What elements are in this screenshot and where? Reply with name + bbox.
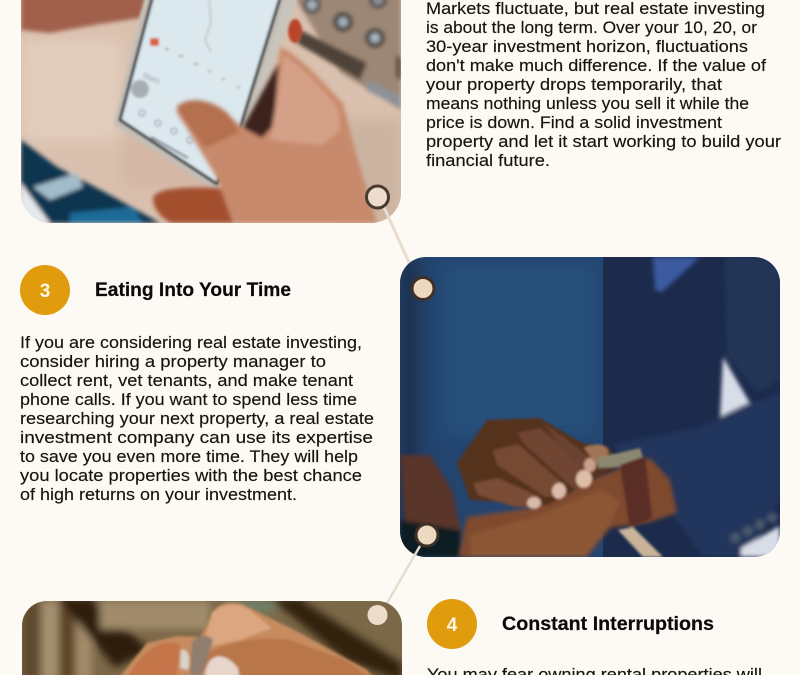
photo: hands holding coin [22,598,402,675]
number badge 3: 3 [40,281,50,302]
text block: markets fluctuate: price is down. Find a solid investment [426,113,722,132]
text block: eating into your time: consider hiring a property manager to [20,352,326,371]
heading: eating into your time: Eating Into Your Time [95,280,291,301]
text block: markets fluctuate: don't make much difference. If the value of [426,56,766,75]
fingers [457,418,620,505]
number badge 3 [20,265,70,315]
timeline node: photo 1 [366,186,388,208]
text block: eating into your time: you locate properties with the best chance [20,466,362,485]
text block: eating into your time: to save you even more time. They will help [20,447,358,466]
number badge 4 [427,599,477,649]
text block: eating into your time: phone calls. If you want to spend less time [20,390,357,409]
text block: eating into your time: of high returns on your investment. [20,485,297,504]
text block: markets fluctuate: 30-year investment horizon, fluctuations [426,37,748,56]
text block: eating into your time: If you are considering real estate investing, [20,333,362,352]
text block: markets fluctuate: is about the long term. Over your 10, 20, or [426,18,757,37]
text block: markets fluctuate: means nothing unless you sell it while the [426,94,749,113]
timeline node: photo 2 bottom [416,524,438,546]
number badge 4: 4 [447,615,458,636]
photo: hand holding phone: Stats [141,71,162,86]
text block: markets fluctuate: your property drops temporarily, that [426,75,722,94]
timeline node: photo 2 top [412,278,434,300]
connector line: photo 2 to photo 3 [386,546,420,605]
photo: hand holding phone [21,0,401,223]
photo: man checking wrist watch [400,257,780,557]
timeline node: photo 3 [368,605,388,625]
text block: eating into your time [20,333,374,504]
lower hand and wrist [458,458,677,557]
text block: markets fluctuate [426,0,781,170]
heading: constant interruptions: Constant Interruptions [502,614,714,635]
text block: markets fluctuate: financial future. [426,151,550,170]
text block: markets fluctuate: property and let it start working to build your [426,132,781,151]
text block: eating into your time: investment company can use its expertise [20,428,373,447]
text block: eating into your time: researching your next property, a real estate [20,409,374,428]
connector line: photo 1 to photo 2 [384,207,416,278]
text block: eating into your time: collect rent, vet tenants, and make tenant [20,371,353,390]
watch [597,448,643,468]
